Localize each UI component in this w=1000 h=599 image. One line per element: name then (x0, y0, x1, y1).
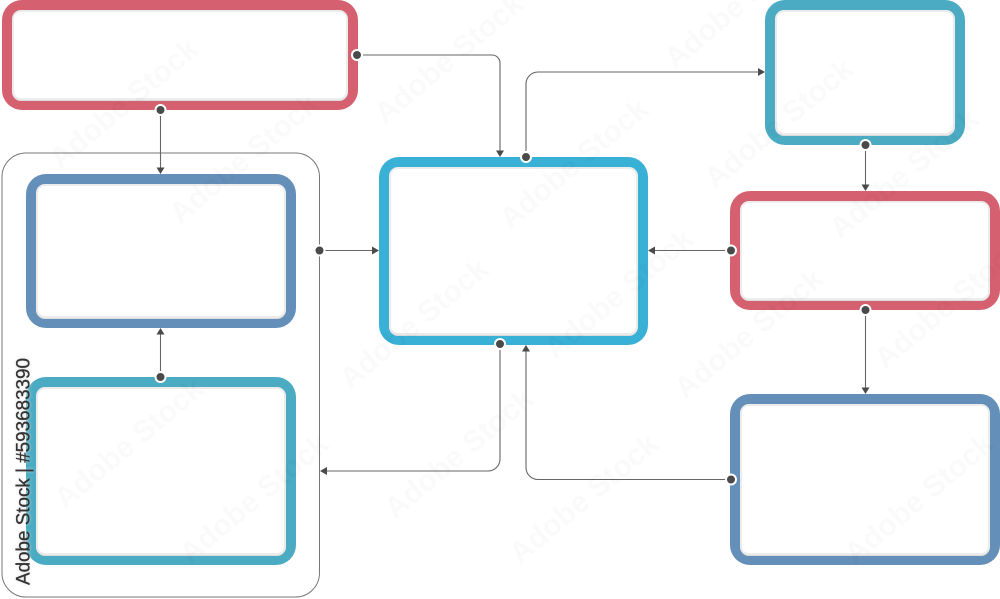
watermarks: Adobe Stock (173, 427, 335, 570)
watermarks: Adobe Stock (668, 262, 830, 405)
arrow: centre box to top right box (521, 68, 765, 162)
panel: left teal box (26, 377, 296, 565)
panel: bottom right blue box (730, 394, 1000, 565)
arrow: middle right box to centre box (648, 246, 736, 256)
arrow: middle right box to bottom right box (860, 305, 870, 394)
arrow: top box to left blue box (156, 105, 166, 174)
watermarks: Adobe Stock (48, 372, 210, 515)
stock credit text: Adobe Stock | #593683390 (12, 358, 34, 585)
watermarks: Adobe Stock (503, 427, 665, 570)
panel: top right teal box (765, 0, 965, 145)
arrow: centre box to left container (320, 339, 505, 475)
watermarks: Adobe Stock (493, 92, 655, 235)
arrow: left container to centre box (314, 246, 379, 256)
watermarks: Adobe Stock (838, 427, 1000, 570)
arrow: top box to centre box (352, 50, 504, 157)
watermarks: Adobe Stock (823, 102, 985, 245)
panel: top red box (2, 0, 358, 110)
arrow: bottom right box to centre box (522, 345, 736, 484)
panel: middle right red box (730, 191, 1000, 310)
panel: centre blue box (379, 157, 648, 345)
watermarks: Adobe Stock (333, 252, 495, 395)
watermarks: Adobe Stock (378, 382, 540, 525)
arrow: top right box to middle right box (860, 140, 870, 191)
watermarks: Adobe Stock (698, 52, 860, 195)
group outline: left container (2, 153, 320, 597)
arrow: left teal box to left blue box (156, 328, 166, 382)
watermarks: Adobe Stock (43, 32, 205, 175)
watermarks: Adobe Stock (538, 222, 700, 365)
panel: left blue box (26, 174, 296, 328)
watermarks: Adobe Stock (163, 87, 325, 230)
